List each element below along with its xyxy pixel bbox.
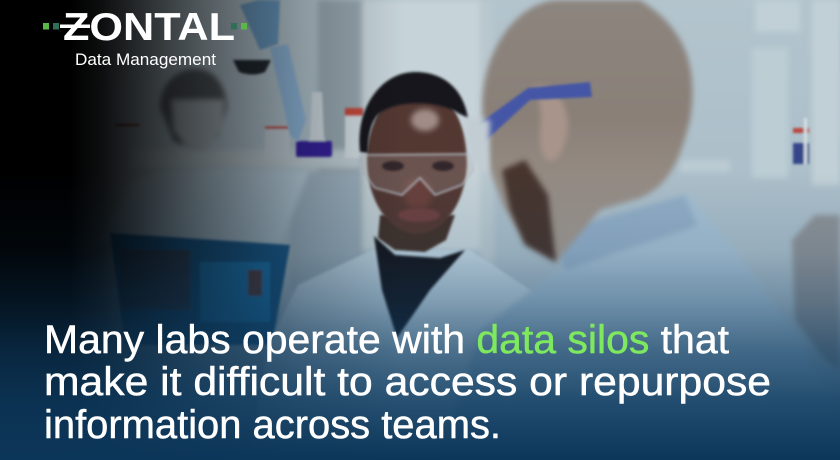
headline (44, 318, 771, 447)
woman in lab coat (250, 72, 570, 460)
bottles and flask on shelf (115, 92, 809, 164)
logo (43, 8, 247, 69)
blue bottom fade overlay (0, 170, 840, 460)
headline: make it difficult to access or repurpose (44, 360, 771, 404)
man in foreground (440, 0, 840, 460)
computer monitor (110, 233, 290, 345)
background scientist (100, 69, 310, 245)
logo subtitle: Data Management (75, 51, 216, 69)
right edge blurred equipment (792, 215, 840, 370)
headline: information across teams. (44, 403, 501, 447)
headline: Many labs operate with data silos that (44, 318, 729, 362)
pipette and gloved hand (233, 0, 306, 142)
